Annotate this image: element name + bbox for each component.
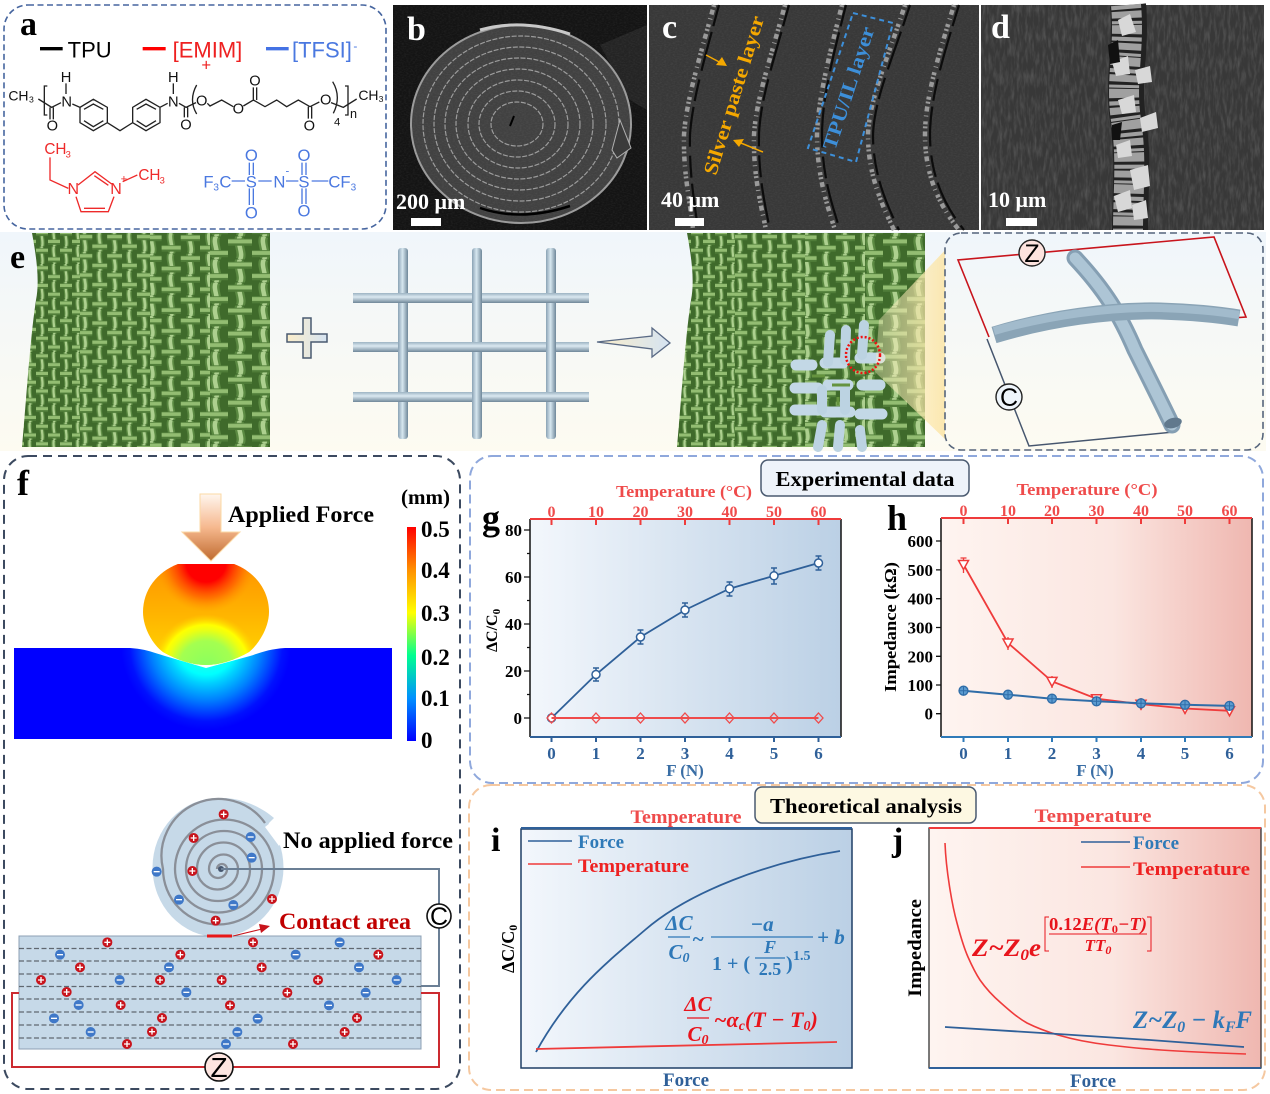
formula: force: 0 (683, 951, 690, 966)
structure: TFSI anion: S (246, 173, 257, 192)
scale bar d: 10 μm (988, 187, 1046, 212)
colour bar: 0.1 (421, 686, 450, 711)
capacitance circuit: C (430, 903, 448, 931)
series: temperature (547, 713, 823, 723)
scale bar c (661, 187, 719, 226)
left axis: 200 (908, 647, 933, 666)
structure: TFSI anion: N (273, 173, 285, 192)
top axis: temperature: 40 (722, 504, 738, 521)
symbol C: C (1000, 384, 1018, 412)
bottom axis: force: 1 (592, 744, 600, 763)
bottom axis: force (959, 744, 1234, 780)
contact area marker: Contact area (279, 909, 412, 934)
bottom label: force: Force (1070, 1071, 1116, 1092)
formula: temperature: −T) (1118, 914, 1147, 935)
capacitance circuit (221, 869, 451, 986)
structure: TPU: 3 (379, 94, 384, 104)
left axis: 600 (908, 532, 933, 551)
bottom axis: force: 3 (1092, 744, 1101, 763)
layered stack (19, 936, 421, 1049)
top axis: temperature: 20 (632, 504, 648, 521)
structure: TFSI anion (203, 146, 357, 222)
formula: temperature (683, 992, 818, 1048)
left axis: 60 (505, 568, 522, 587)
structure: TFSI anion: 3 (351, 183, 357, 194)
structure: TPU: n (350, 107, 357, 121)
formula: temperature: ) (808, 1007, 818, 1032)
structure: TPU: O (196, 93, 207, 109)
top axis: temperature: Temperature (°C) (1016, 480, 1158, 499)
top axis: temperature: 50 (1177, 503, 1193, 520)
chart i (491, 807, 852, 1091)
legend (528, 832, 689, 877)
bottom axis: force: 0 (959, 744, 968, 763)
colour bar: 0 (421, 728, 432, 753)
scale bar d (988, 187, 1046, 226)
structure: TPU: O (47, 118, 58, 134)
FEM simulation (14, 564, 392, 739)
bottom axis: force: F (N) (666, 761, 704, 780)
formula: temperature: 0 (803, 1019, 810, 1034)
label a: a (20, 6, 37, 43)
left axis: 0 (924, 705, 933, 724)
chart j (891, 806, 1261, 1092)
label i: i (491, 822, 500, 859)
top axis: temperature: 30 (1088, 503, 1104, 520)
series: temperature (958, 558, 1234, 716)
symbol Z (1019, 240, 1045, 268)
bottom axis: force: 6 (814, 744, 823, 763)
structure: TPU: CH (358, 87, 379, 103)
formula: force: ΔC (664, 911, 694, 935)
bottom axis: force (547, 744, 823, 780)
formula: temperature: 0 (1020, 947, 1029, 964)
legend: Force (1133, 833, 1179, 854)
legend: Temperature (1133, 859, 1250, 880)
impedance circuit: Z (210, 1052, 228, 1083)
annotation: TPU/IL layer: TPU/IL layer (819, 24, 879, 153)
formula: temperature: Z~Z (972, 935, 1017, 962)
bottom axis: force: 6 (1225, 744, 1234, 763)
structure: TFSI anion: CF (328, 173, 351, 192)
legend: components (40, 37, 357, 75)
chart g (482, 482, 841, 780)
annotation: TPU/IL layer (808, 13, 893, 162)
curve: force (536, 851, 840, 1052)
legend: components: [TFSI] (292, 37, 352, 62)
structure: TFSI anion: - (285, 166, 289, 178)
label j: j (891, 822, 903, 859)
spiral fibre (152, 798, 288, 937)
formula: force (664, 911, 845, 979)
label b: b (407, 11, 426, 48)
panel e: device schematic (0, 232, 1266, 451)
series: force (548, 556, 822, 722)
arrow: applied force (182, 494, 240, 561)
formula: force: ~ (692, 927, 704, 951)
formula: temperature: TT (1085, 936, 1105, 955)
top axis: temperature: 10 (588, 504, 604, 521)
structure: TPU: O (180, 117, 192, 133)
formula: temperature: c (739, 1019, 746, 1034)
formula: force: F (1235, 1007, 1252, 1034)
legend: components: - (353, 39, 357, 53)
top axis: temperature: 40 (1133, 503, 1149, 520)
panel b: SEM spiral cross-section (393, 5, 647, 230)
series: force (959, 686, 1234, 710)
formula: force: 1.5 (793, 949, 810, 964)
structure: TPU: O (249, 73, 261, 89)
curve: force (945, 1027, 1244, 1047)
structure: EMIM cation: N (110, 181, 122, 198)
left axis: ΔC/C (484, 614, 501, 652)
bottom axis: force: 4 (1137, 744, 1146, 763)
formula: force: + b (817, 925, 845, 949)
ions (36, 809, 402, 1049)
annotation: Silver paste layer: Silver paste layer (700, 13, 769, 177)
legend: components: TPU (68, 37, 112, 62)
legend: Temperature (578, 856, 689, 877)
colour bar: 0.5 (421, 517, 450, 542)
left axis: 400 (908, 590, 933, 609)
top axis: temperature: 50 (766, 504, 782, 521)
bottom label: force: Force (663, 1070, 709, 1091)
label h: h (887, 498, 907, 538)
legend: Force (578, 832, 624, 853)
symbol Z: Z (1024, 240, 1040, 268)
left axis: 40 (505, 615, 522, 634)
top axis: temperature: 0 (548, 504, 556, 521)
formula: temperature: (T − T (745, 1007, 805, 1032)
panel d: SEM silver layer close-up (981, 5, 1264, 230)
chart h (881, 480, 1252, 780)
formula: force: 1 + ( (712, 953, 750, 975)
scale bar b (396, 189, 465, 226)
formula: force: ) (786, 953, 793, 975)
structure: TFSI anion: O (245, 203, 258, 222)
panel f: simulation and mechanism (4, 456, 460, 1089)
structure: TPU: O (304, 118, 315, 134)
panel: theoretical analysis (469, 785, 1265, 1092)
formula: temperature: 0 (702, 1033, 709, 1048)
structure: TFSI anion: O (298, 202, 311, 221)
formula: temperature: ΔC (683, 992, 713, 1016)
scale bar b: 200 μm (396, 189, 465, 214)
formula: force: F (763, 937, 776, 957)
bottom axis: force: 2 (636, 744, 645, 763)
left axis: 500 (908, 561, 933, 580)
formula: temperature (971, 914, 1151, 964)
formula: force: Z~Z (1133, 1007, 1178, 1034)
legend (1081, 833, 1250, 880)
curve: temperature (536, 1042, 837, 1049)
bottom axis: force: 5 (1181, 744, 1189, 763)
structure: TPU: O (233, 102, 244, 118)
bottom axis: force: 0 (547, 744, 556, 763)
formula: force: −a (750, 912, 774, 936)
bottom axis: force: 1 (1004, 744, 1012, 763)
top axis: temperature (960, 480, 1238, 520)
bottom axis: force: 5 (770, 744, 778, 763)
structure: TFSI anion: C (219, 173, 231, 192)
structure: TFSI anion: O (245, 146, 258, 165)
contact area marker (207, 909, 412, 936)
panel a: chemical structures (4, 5, 386, 229)
text: applied force: Applied Force (228, 502, 374, 527)
left label: ΔC/C (498, 931, 518, 973)
legend: components: + (201, 56, 211, 75)
formula: temperature: 0.12E(T (1049, 914, 1111, 934)
heading: experimental data: Experimental data (776, 467, 955, 491)
label d: d (991, 9, 1010, 46)
formula: temperature: 0 (1105, 943, 1111, 957)
top axis: temperature: 60 (1222, 503, 1238, 520)
electrode grid (353, 248, 589, 439)
top axis: temperature (548, 482, 826, 521)
bottom axis: force: F (N) (1076, 761, 1114, 780)
top label: temperature: Temperature (630, 807, 742, 828)
impedance circuit (12, 993, 439, 1083)
label c: c (662, 9, 677, 46)
heading: theoretical analysis: Theoretical analysis (770, 794, 962, 818)
formula: force: 0 (1177, 1019, 1185, 1036)
structure: TFSI anion: S (298, 173, 310, 192)
structure: EMIM cation: 3 (160, 175, 165, 185)
top label: temperature: Temperature (1034, 806, 1152, 827)
structure: TPU: N (168, 94, 179, 110)
colour bar: 0.3 (421, 601, 450, 626)
curve: temperature (945, 843, 1246, 1054)
formula: temperature: e (1029, 935, 1041, 962)
legend: components: [EMIM] (173, 37, 242, 62)
top axis: temperature: 60 (810, 504, 826, 521)
structure: TPU: O (320, 93, 331, 109)
structure: EMIM cation: 3 (66, 149, 71, 159)
left axis: 0 (491, 608, 503, 614)
left axis: 300 (908, 618, 933, 638)
structure: EMIM cation: N (68, 181, 79, 198)
structure: EMIM cation: CH (138, 167, 160, 184)
left axis (484, 521, 522, 728)
heading: theoretical analysis (755, 787, 976, 823)
formula: force: − k (1185, 1007, 1225, 1034)
label g: g (482, 498, 500, 538)
top axis: temperature: Temperature (°C) (616, 482, 752, 501)
top axis: temperature: 10 (1000, 503, 1016, 520)
formula: force: C (668, 940, 683, 964)
structure: TFSI anion: F (203, 173, 214, 192)
structure: TPU: 4 (334, 116, 340, 128)
structure: TFSI anion: O (298, 146, 311, 165)
structure: TPU: H (168, 70, 179, 86)
top axis: temperature: 0 (960, 503, 968, 520)
structure: TPU: 3 (29, 95, 34, 105)
colour bar: 0.2 (421, 645, 450, 670)
fabric swatch (18, 233, 270, 448)
arrow: combine (597, 328, 670, 357)
text: no applied force: No applied force (283, 828, 453, 853)
panel: experimental data (470, 456, 1263, 783)
top axis: temperature: 30 (677, 504, 693, 521)
structure: EMIM cation: + (121, 173, 128, 185)
formula: force: F (1224, 1019, 1236, 1036)
structure: EMIM cation (44, 141, 165, 212)
inset: fibre crossing (945, 233, 1263, 450)
icon: plus sign (287, 318, 327, 358)
formula: temperature: ~α (714, 1007, 739, 1032)
panel c: SEM layers (649, 5, 979, 230)
bottom axis: force: 4 (725, 744, 734, 763)
structure: TPU: CH (8, 88, 29, 104)
colour bar (401, 485, 450, 753)
left axis: Impedance (kΩ) (881, 562, 900, 692)
formula: temperature: 0 (1112, 922, 1118, 936)
symbol C (996, 384, 1022, 412)
colour bar: (mm) (401, 485, 450, 509)
left axis (881, 532, 933, 724)
structure: TPU: H (61, 70, 71, 86)
scale bar c: 40 μm (661, 187, 719, 212)
structure: TPU (8, 70, 384, 134)
left label: 0 (506, 925, 520, 931)
highlighted junction (846, 337, 880, 373)
zoom highlight beam (875, 247, 948, 442)
structure: TPU: N (61, 94, 72, 110)
heading: experimental data (761, 460, 969, 496)
formula: temperature: C (687, 1022, 702, 1046)
bottom axis: force: 3 (681, 744, 689, 763)
bottom axis: force: 2 (1048, 744, 1056, 763)
label f: f (17, 463, 30, 503)
colour bar: 0.4 (421, 558, 450, 583)
woven device (673, 233, 925, 448)
structure: TFSI anion: 3 (213, 183, 219, 194)
left axis: 0 (514, 709, 522, 728)
left label: Impedance (905, 899, 926, 997)
formula: force: 2.5 (759, 959, 781, 979)
left axis: 100 (908, 676, 933, 695)
structure: EMIM cation: CH (44, 141, 66, 158)
top axis: temperature: 20 (1044, 503, 1060, 520)
left axis: 20 (505, 662, 522, 681)
label e: e (10, 239, 25, 276)
left axis: 80 (505, 521, 522, 540)
